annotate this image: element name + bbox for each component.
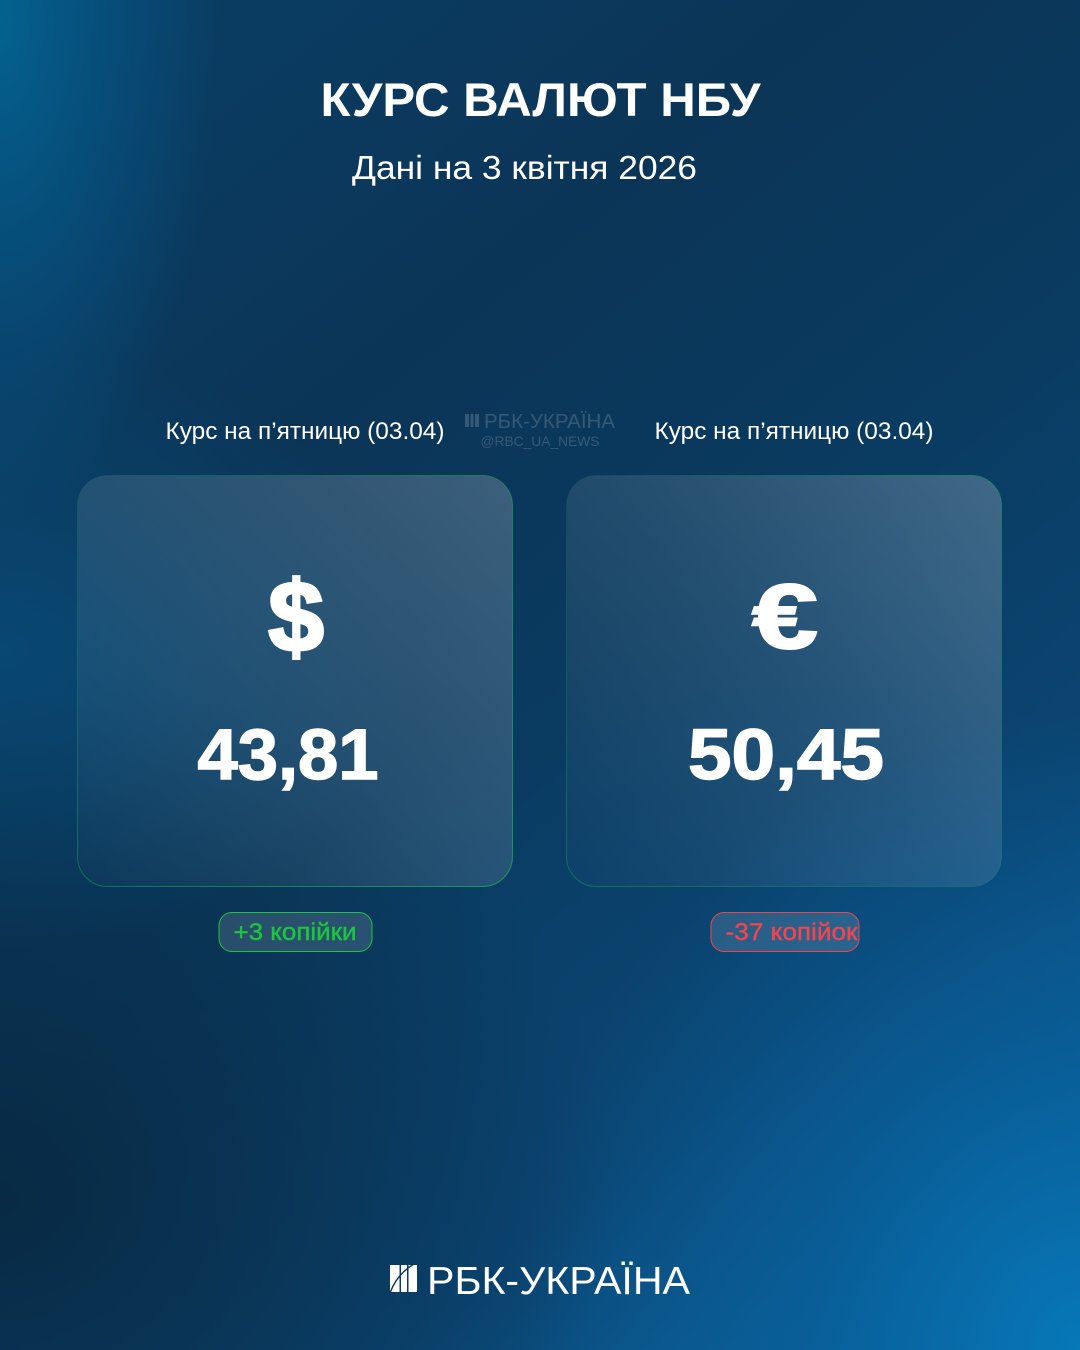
label: EUR rate date: Курс на п’ятницю (03.04) (654, 418, 934, 445)
watermark (465, 411, 616, 449)
badge: USD change (219, 912, 372, 952)
watermark name: РБК-УКРАЇНА (484, 411, 616, 433)
badge: EUR change (711, 912, 859, 952)
icon: dollar sign: $ (268, 561, 324, 673)
panel: EUR card (566, 476, 1002, 886)
watermark handle: @RBC_UA_NEWS (480, 433, 600, 449)
logo icon (390, 1264, 417, 1293)
panel: USD card (78, 476, 512, 886)
USD rate value: 43,81 (198, 716, 378, 795)
EUR rate value: 50,45 (688, 716, 884, 795)
title: КУРС ВАЛЮТ НБУ (320, 73, 761, 126)
footer logo (390, 1260, 690, 1303)
icon: euro sign: € (752, 566, 818, 668)
subtitle: date: Дані на 3 квітня 2026 (352, 149, 697, 186)
EUR change text: -37 копійок (726, 919, 858, 946)
watermark icon (465, 414, 479, 427)
USD change text: +3 копійки (234, 919, 356, 946)
logo wordmark: РБК-УКРАЇНА (427, 1260, 690, 1303)
label: USD rate date: Курс на п’ятницю (03.04) (166, 418, 444, 445)
